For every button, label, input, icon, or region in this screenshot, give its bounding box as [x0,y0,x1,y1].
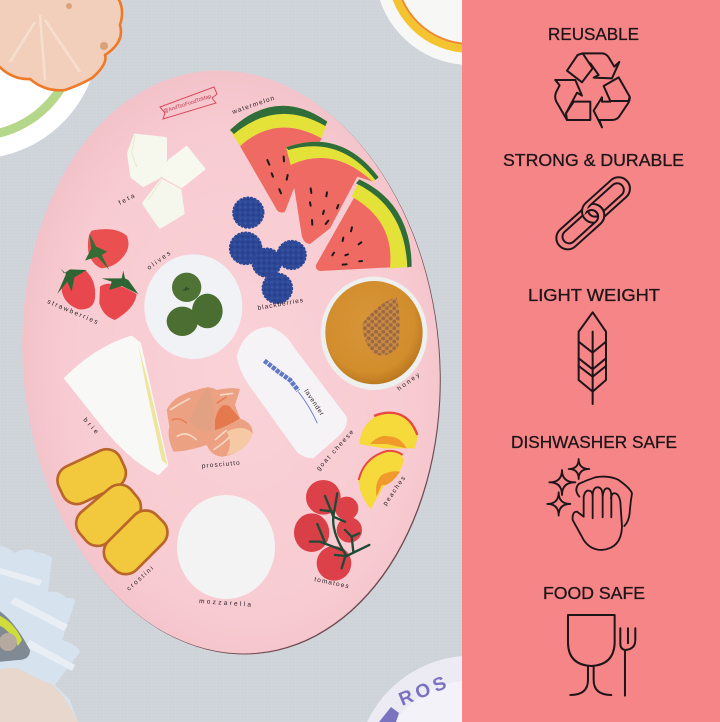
label: feta: feta [118,192,138,207]
slice 3 [316,179,412,271]
bottom-right plate with ROS lettering [367,656,462,722]
heading: dishwasher safe: DISHWASHER SAFE [511,432,677,452]
label: mozzarella: mozzarella [199,598,252,609]
icon: recycle arrows [555,53,630,127]
label: lavender: lavender [302,388,325,418]
peach slices [358,413,418,509]
heading: food safe: FOOD SAFE [543,583,645,603]
icon: feather [579,312,606,404]
panel: product features [462,0,720,722]
prosciutto [167,387,253,457]
icon: glass and fork [568,615,635,696]
label: crostini: crostini [126,565,155,592]
heading: strong and durable: STRONG & DURABLE [503,150,684,170]
top-left fluted glass dish [0,0,122,90]
slice 1 [230,106,327,213]
label: honey: honey [396,371,422,393]
strawberries [57,229,138,320]
platter rim shadow [0,54,465,672]
label: watermelon: watermelon [230,95,276,116]
handwritten food labels [46,95,422,609]
crostini 1 [52,444,131,509]
icon: hand wiping with sparkles [547,459,632,550]
maker's ribbon tag [160,87,217,119]
olives dish [144,254,242,359]
slice 2 [286,142,379,244]
label: peaches: peaches [382,475,408,507]
label: strawberries: strawberries [46,298,99,326]
watermelon slices [230,106,412,271]
label: blackberries: blackberries [257,297,304,312]
mozzarella dish [177,495,275,599]
maker's ribbon tag: @AndTooFoodToMap [163,94,212,115]
feta cubes [128,135,204,227]
crostini 3 [97,504,174,580]
heading: light weight: LIGHT WEIGHT [528,285,660,305]
label: tomatoes: tomatoes [314,576,350,590]
crostini 2 [70,478,147,552]
label: brie: brie [82,417,100,436]
heading: reusable: REUSABLE [548,24,639,44]
background: linen tablecloth [0,0,462,722]
tomato vine [294,480,369,581]
label: prosciutto: prosciutto [202,460,240,470]
icon: chain link [555,176,631,250]
top-left plate with green ring [0,0,99,159]
label: olives: olives [146,250,173,272]
crostini toasts [52,444,174,580]
brie wedge [65,337,167,474]
top-right plate with yellow ring [375,0,565,65]
label: goat cheese: goat cheese [315,429,356,472]
blackberries [230,198,306,303]
honey dish [321,277,427,390]
bottom-left scalloped paper packaging [0,545,80,722]
platter body [0,53,464,671]
goat cheese with lavender [237,327,347,458]
serving platter [0,53,465,672]
bottom-right plate with ROS lettering: ROS [396,671,453,711]
